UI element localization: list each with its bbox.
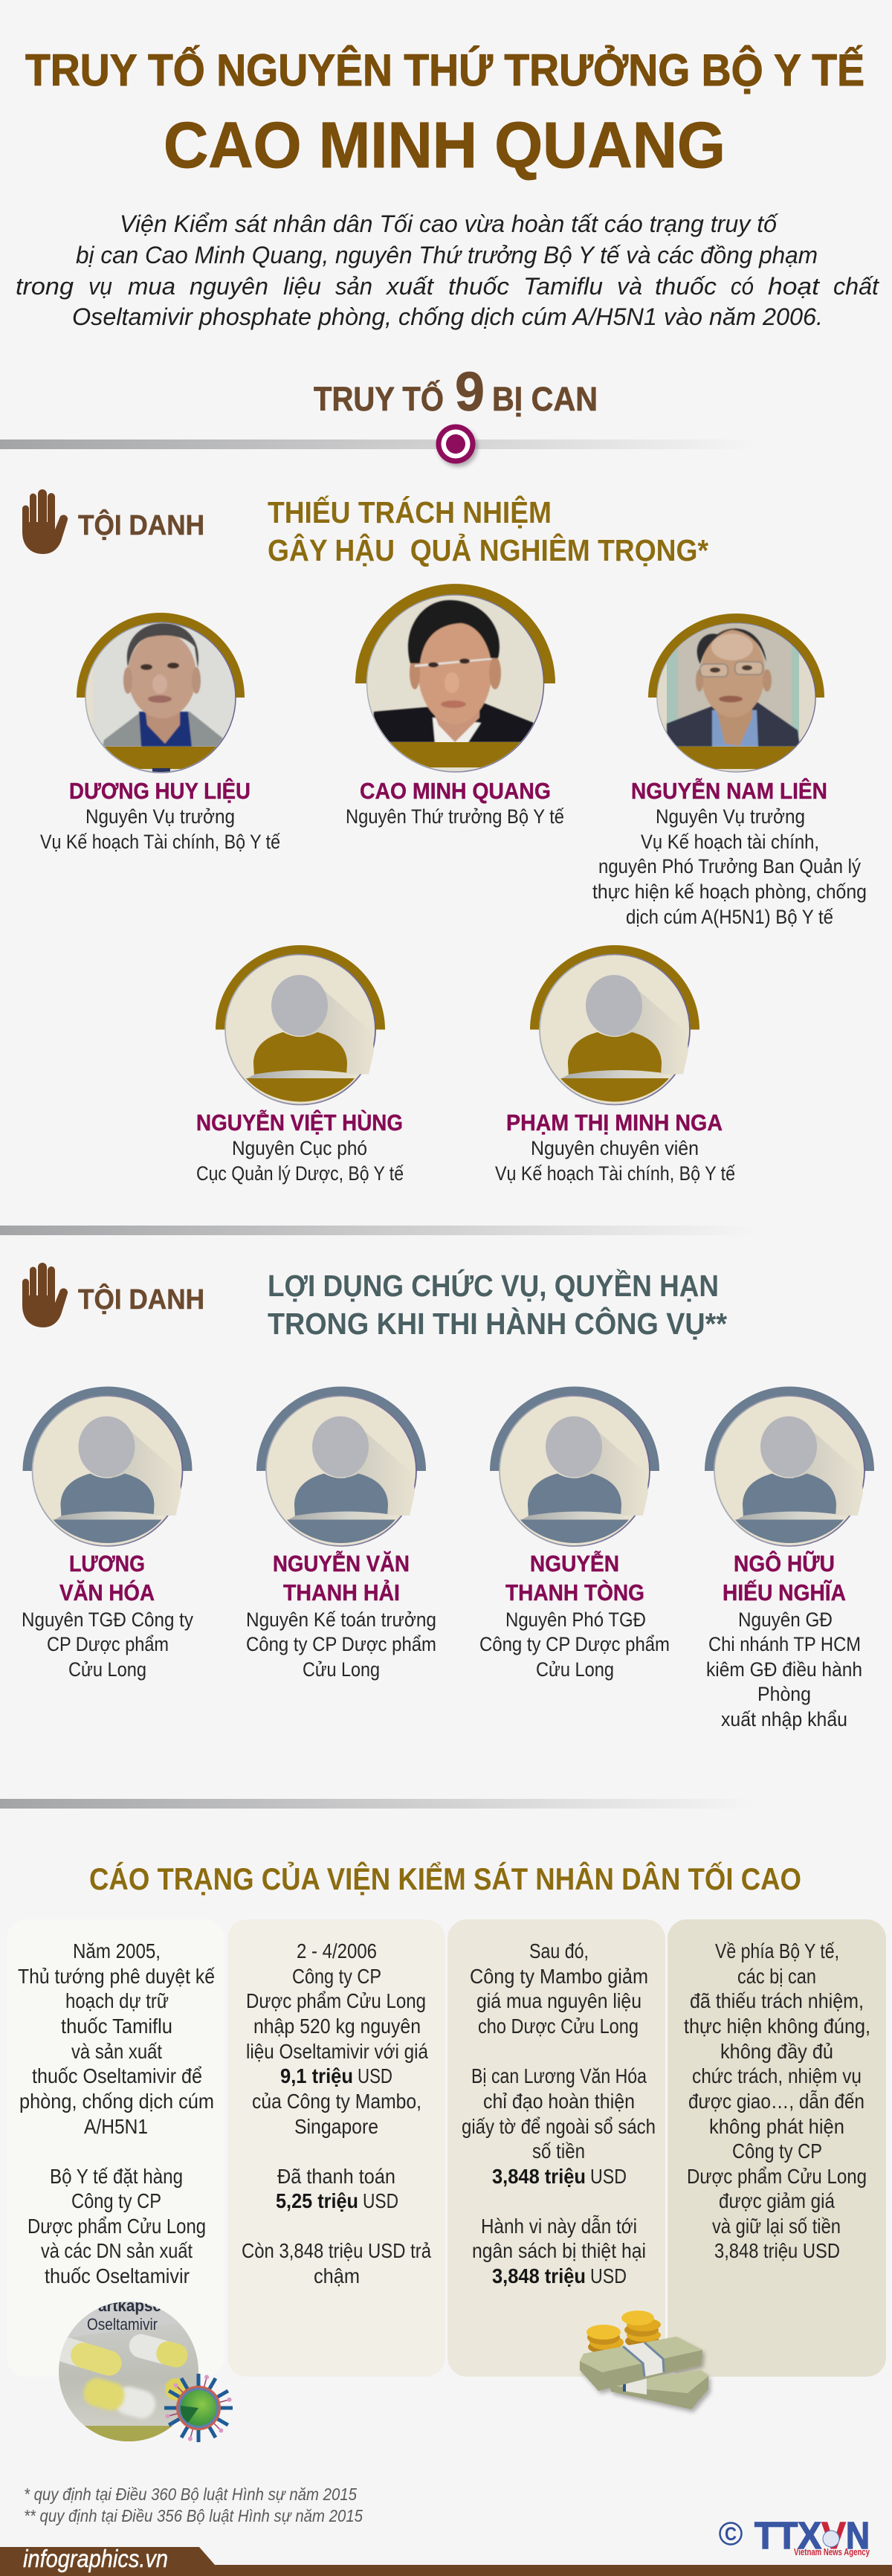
description [495, 1137, 735, 1185]
text: column 3: USD [590, 2264, 627, 2287]
footer text: infographics.vn [23, 2545, 168, 2572]
text: column 2: USD [358, 2064, 392, 2087]
text: column 1: thuốc Oseltamivir [45, 2264, 190, 2287]
heading: thieu trach nhiem: GÂY HẬU QUẢ NGHIÊM TRỌNG* [268, 533, 708, 567]
text: column 2: Công ty CP [292, 1965, 381, 1988]
portrait photo [77, 613, 245, 773]
avatar placeholder [490, 1386, 659, 1546]
description: kiêm GĐ điều hành [706, 1658, 862, 1681]
description: Chi nhánh TP HCM [708, 1633, 861, 1655]
text: column 3: USD [590, 2165, 627, 2188]
text: column 2 [242, 1939, 431, 2287]
text: column 2: của Công ty Mambo, [252, 2090, 421, 2113]
description: xuất nhập khẩu [721, 1708, 847, 1730]
avatar placeholder [216, 945, 385, 1105]
name [723, 1550, 846, 1606]
description: Cửu Long [536, 1658, 614, 1681]
description: Vụ Kế hoạch Tài chính, Bộ Y tế [495, 1162, 735, 1185]
text: column 4: đã thiếu trách nhiệm, [690, 1989, 864, 2012]
panel: column 4 [668, 1919, 886, 2377]
description: Nguyên chuyên viên [531, 1137, 699, 1159]
description: Nguyên Cục phó [232, 1137, 367, 1159]
description: Nguyên TGĐ Công ty [22, 1609, 193, 1631]
text: column 4: và giữ lại số tiền [712, 2215, 841, 2238]
intro text: và [617, 273, 642, 300]
text: column 3: 3,848 triệu [492, 2165, 586, 2188]
intro text: thuốc [448, 273, 509, 300]
panel: column 1 [7, 1919, 224, 2377]
portrait photo [355, 584, 555, 773]
intro text: trong [16, 273, 74, 300]
panel: Pham Thi Minh Nga [495, 945, 735, 1185]
heading: truy to 9 bi can: TRUY TỐ [314, 380, 444, 418]
name: VĂN HÓA [59, 1579, 155, 1606]
name: DƯƠNG HUY LIỆU [69, 777, 251, 804]
text: column 2: chậm [314, 2264, 360, 2287]
text: column 3: giá mua nguyên liệu [476, 1989, 641, 2012]
image: oseltamivir capsules: artkapse [98, 2296, 161, 2315]
description: dịch cúm A(H5N1) Bộ Y tế [626, 906, 833, 928]
name: NGUYỄN NAM LIÊN [631, 777, 827, 804]
text: column 1: phòng, chống dịch cúm [19, 2090, 214, 2113]
description: Nguyên Vụ trưởng [656, 805, 805, 828]
description: Vụ Kế hoạch Tài chính, Bộ Y tế [40, 831, 280, 853]
label: toi danh 2: TỘI DANH [78, 1282, 204, 1316]
text: column 4: Dược phẩm Cửu Long [687, 2165, 867, 2188]
heading: cao trang: CÁO TRẠNG CỦA VIỆN KIỂM SÁT NHÂN DÂN TỐI CAO [89, 1861, 801, 1896]
icon: hand 1 [22, 489, 68, 554]
text: column 1 [18, 1939, 215, 2287]
heading: thieu trach nhiem: THIẾU TRÁCH NHIỆM [268, 495, 552, 529]
text: column 1: hoạch dự trữ [65, 1989, 169, 2012]
description: Phòng [757, 1683, 811, 1705]
panel: column 2 [227, 1919, 445, 2377]
description [40, 805, 280, 853]
name: NGUYỄN VIỆT HÙNG [196, 1109, 403, 1136]
text: column 4: không phát hiện [709, 2115, 844, 2138]
banknote bundles [580, 2337, 708, 2409]
heading: truy to 9 bi can [314, 361, 598, 422]
text: column 3 [462, 1939, 656, 2287]
heading: thieu trach nhiem [268, 495, 708, 567]
text: column 4: thực hiện không đúng, [684, 2015, 870, 2038]
panel: Nguyen Nam Lien [592, 614, 867, 928]
intro text: nguyên [190, 273, 268, 300]
panel: Nguyen Thanh Tong [479, 1386, 670, 1681]
name: HIẾU NGHĨA [723, 1580, 846, 1606]
text: column 1: thuốc Oseltamivir để [32, 2064, 202, 2087]
description: Nguyên Thứ trưởng Bộ Y tế [346, 805, 564, 828]
intro text: Oseltamivir phosphate phòng, chống dịch cúm A/H5N1 vào năm 2006. [72, 303, 823, 330]
icon: target marker [436, 424, 476, 464]
name [59, 1551, 155, 1606]
text: column 2: liệu Oseltamivir với giá [246, 2040, 428, 2063]
intro text: mua [128, 273, 175, 300]
panel: Duong Huy Lieu [40, 613, 280, 853]
name: PHẠM THỊ MINH NGA [506, 1110, 723, 1136]
intro text: thuốc [655, 273, 717, 300]
heading: loi dung chuc vu [268, 1269, 727, 1341]
text: column 4: không đầy đủ [720, 2040, 833, 2063]
text: column 3: 3,848 triệu [492, 2264, 586, 2287]
intro text: xuất [385, 273, 434, 300]
text: column 2: Dược phẩm Cửu Long [246, 1989, 426, 2012]
description: Vụ Kế hoạch tài chính, [641, 831, 819, 853]
intro text: vụ [88, 273, 112, 300]
description: CP Dược phẩm [47, 1633, 169, 1655]
avatar placeholder [22, 1386, 192, 1546]
logo: TTXVN [720, 2514, 870, 2557]
description [479, 1609, 670, 1681]
intro text: hoạt [768, 273, 820, 300]
text: column 2: USD [363, 2189, 398, 2212]
description: Công ty CP Dược phẩm [479, 1633, 670, 1655]
coins [586, 2311, 661, 2354]
logo: TTXVN: V [821, 2514, 846, 2557]
text: column 1: và sản xuất [71, 2040, 162, 2063]
name: NGÔ HỮU [734, 1550, 835, 1577]
avatar placeholder [530, 945, 699, 1105]
logo: TTXVN: N [846, 2514, 870, 2557]
name [505, 1551, 644, 1606]
panel: Luong Van Hoa [22, 1386, 193, 1681]
panel: Cao Minh Quang [346, 584, 564, 828]
name: NGUYỄN VĂN [273, 1551, 410, 1577]
title [25, 45, 864, 181]
description: nguyên Phó Trưởng Ban Quản lý [598, 855, 861, 878]
description: Nguyên GĐ [738, 1609, 833, 1631]
intro text [16, 210, 879, 330]
avatar placeholder [256, 1386, 426, 1546]
text: column 2: Đã thanh toán [277, 2165, 395, 2188]
text: column 1: và các DN sản xuất [41, 2239, 193, 2262]
name [273, 1551, 410, 1606]
image: oseltamivir capsules [59, 2302, 233, 2442]
text: column 1: thuốc Tamiflu [61, 2015, 172, 2038]
panel: Nguyen Viet Hung [196, 945, 404, 1185]
name: NGUYỄN [530, 1551, 619, 1577]
text: column 4: được giao…, dẫn đến [688, 2090, 864, 2113]
text: column 2: Còn 3,848 triệu USD trả [242, 2239, 431, 2262]
name: LƯƠNG [69, 1551, 145, 1577]
logo: TTXVN: C [725, 2524, 737, 2545]
text: column 3: Bị can Lương Văn Hóa [471, 2064, 647, 2087]
text: column 3: Công ty Mambo giảm [470, 1965, 648, 1988]
name: THANH HẢI [283, 1580, 400, 1606]
text: column 2: 2 - 4/2006 [297, 1939, 377, 1962]
description: Nguyên Phó TGĐ [505, 1609, 646, 1631]
text: column 4: các bị can [737, 1965, 816, 1988]
text: column 3: Sau đó, [529, 1939, 589, 1962]
intro text: sản [335, 273, 372, 300]
heading: loi dung chuc vu: LỢI DỤNG CHỨC VỤ, QUYỀN HẠN [268, 1269, 719, 1303]
icon: virus [164, 2374, 233, 2442]
name: THANH TÒNG [505, 1579, 644, 1606]
text: column 2: nhập 520 kg nguyên [253, 2015, 421, 2038]
text: column 2: Singapore [294, 2115, 378, 2138]
text: column 4: được giảm giá [719, 2189, 835, 2212]
text: column 3: chỉ đạo hoàn thiện [483, 2090, 635, 2113]
intro text: chất [833, 273, 879, 300]
text: column 3: cho Dược Cửu Long [478, 2015, 639, 2038]
text: column 3: số tiền [532, 2139, 585, 2163]
panel: Ngo Huu Hieu Nghia [705, 1386, 874, 1730]
title: CAO MINH QUANG [164, 109, 725, 181]
logo: TTXVN: TTX [754, 2514, 821, 2557]
text: column 1: Năm 2005, [73, 1939, 161, 1962]
text: column 3: ngân sách bị thiệt hại [472, 2239, 646, 2262]
image: oseltamivir capsules: Oseltamivir [87, 2315, 158, 2334]
description: Nguyên Kế toán trưởng [246, 1609, 436, 1631]
text: column 1: A/H5N1 [84, 2115, 148, 2138]
description [592, 805, 867, 928]
text: column 2: 9,1 triệu [280, 2064, 353, 2087]
footnotes: * quy định tại Điều 360 Bộ luật Hình sự năm 2015 [24, 2485, 357, 2504]
text: column 1: Thủ tướng phê duyệt kế [18, 1965, 215, 1988]
icon: hand 2 [22, 1263, 68, 1327]
text: column 1: Công ty CP [71, 2189, 161, 2212]
heading: truy to 9 bi can: BỊ CAN [492, 380, 598, 418]
intro text: liệu [283, 273, 321, 300]
text: column 1: Bộ Y tế đặt hàng [50, 2165, 183, 2188]
footnotes: ** quy định tại Điều 356 Bộ luật Hình sự năm 2015 [24, 2506, 363, 2525]
description [196, 1137, 404, 1185]
text: column 4: 3,848 triệu USD [714, 2239, 840, 2262]
label: toi danh 1: TỘI DANH [78, 508, 204, 541]
description: Cục Quản lý Dược, Bộ Y tế [196, 1162, 404, 1185]
description: thực hiện kế hoạch phòng, chống [592, 880, 867, 903]
description: Cửu Long [303, 1658, 380, 1681]
description [246, 1609, 436, 1681]
footer bar [0, 2545, 892, 2576]
heading: truy to 9 bi can: 9 [455, 361, 485, 422]
panel: Nguyen Van Thanh Hai [246, 1386, 436, 1681]
text: column 3: Hành vi này dẫn tới [481, 2215, 637, 2238]
text: column 4: chức trách, nhiệm vụ [692, 2064, 862, 2087]
text: column 4: Công ty CP [732, 2139, 822, 2163]
image: money and coins [580, 2311, 708, 2409]
description: Nguyên Vụ trưởng [85, 805, 235, 828]
intro text: Viện Kiểm sát nhân dân Tối cao vừa hoàn tất cáo trạng truy tố [120, 210, 779, 237]
text: column 1: Dược phẩm Cửu Long [28, 2215, 206, 2238]
avatar placeholder [705, 1386, 874, 1546]
portrait photo [648, 614, 824, 772]
heading: loi dung chuc vu: TRONG KHI THI HÀNH CÔNG VỤ** [268, 1307, 727, 1341]
text: column 4: Về phía Bộ Y tế, [715, 1939, 839, 1962]
description: Cửu Long [68, 1658, 146, 1681]
text: column 4 [684, 1939, 870, 2262]
intro text: có [731, 273, 754, 300]
description [22, 1609, 193, 1681]
description [706, 1609, 862, 1730]
description: Công ty CP Dược phẩm [246, 1633, 436, 1655]
intro text: Tamiflu [523, 273, 603, 300]
panel: column 3 [447, 1919, 665, 2377]
name: CAO MINH QUANG [360, 778, 551, 804]
intro text: bị can Cao Minh Quang, nguyên Thứ trưởng Bộ Y tế và các đồng phạm [76, 242, 818, 268]
footnotes [24, 2485, 363, 2525]
text: column 3: giấy tờ để ngoài sổ sách [462, 2115, 656, 2138]
text: column 2: 5,25 triệu [276, 2189, 358, 2212]
